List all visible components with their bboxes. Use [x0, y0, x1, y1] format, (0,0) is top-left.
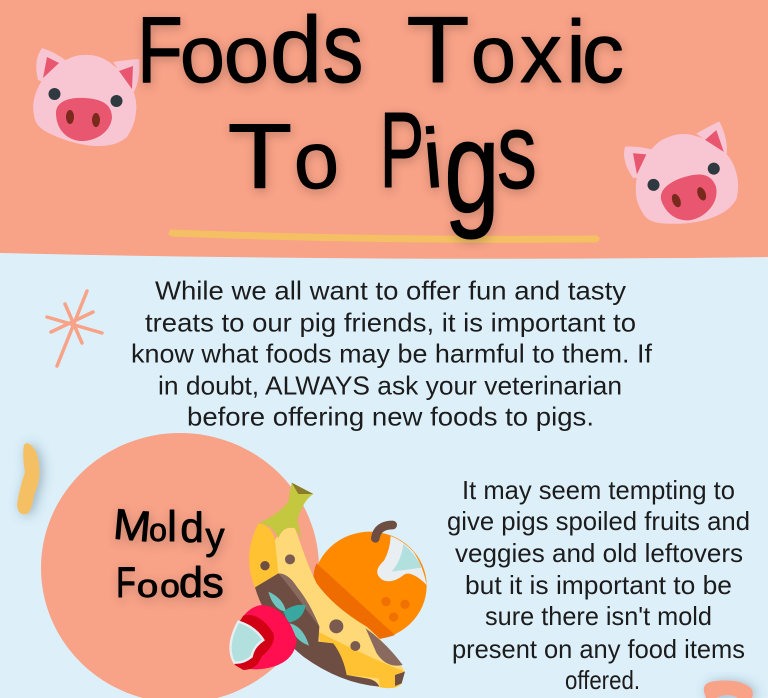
intro text: treats to our pig friends, it is important to	[145, 308, 636, 338]
description text: veggies and old leftovers	[455, 538, 743, 568]
description text: present on any food items	[452, 634, 745, 664]
title: i	[566, 2, 586, 101]
intro text: know what foods may be harmful to them. If	[131, 338, 653, 368]
intro text: in doubt, ALWAYS ask your veterinarian	[158, 370, 622, 400]
description text	[447, 475, 750, 695]
title: o	[291, 115, 342, 208]
description text: sure there isn't mold	[485, 601, 712, 631]
heading: Moldy Foods: o	[137, 569, 158, 604]
heading: Moldy Foods: l	[167, 503, 177, 551]
icon: moldy foods illustration	[230, 483, 427, 688]
heading: Moldy Foods: d	[179, 559, 203, 607]
title: g	[444, 94, 500, 240]
intro text: While we all want to offer fun and tasty	[155, 276, 626, 306]
title: o	[177, 9, 228, 102]
heading: Moldy Foods: d	[180, 504, 204, 551]
decorative salmon blob bottom right	[704, 681, 753, 698]
banana	[249, 483, 405, 688]
orange	[313, 525, 427, 640]
description text: offered.	[565, 665, 640, 695]
title: F	[137, 0, 183, 103]
icon: pig right	[617, 111, 752, 241]
title: o	[221, 9, 272, 102]
icon: starburst	[47, 291, 102, 366]
heading: Moldy Foods: y	[206, 516, 224, 558]
heading: Moldy Foods: o	[160, 569, 180, 605]
title	[137, 0, 624, 240]
heading: Moldy Foods: M	[111, 500, 153, 551]
heading: Moldy Foods: o	[149, 512, 167, 548]
decorative yellow blob	[17, 443, 39, 514]
strawberry	[230, 592, 309, 670]
description text: but it is important to be	[465, 570, 732, 600]
title: d	[270, 0, 322, 102]
intro text: before offering new foods to pigs.	[187, 402, 594, 432]
panel: header band	[0, 0, 768, 259]
title: i	[419, 110, 446, 206]
title: P	[380, 91, 424, 211]
description text: give pigs spoiled fruits and	[447, 506, 750, 536]
icon: pig left	[33, 48, 139, 146]
title: s	[497, 91, 537, 212]
description text: It may seem tempting to	[462, 475, 735, 505]
title: o	[468, 9, 519, 102]
title: T	[228, 105, 292, 208]
heading: Moldy Foods	[111, 500, 224, 607]
salmon circle	[41, 433, 319, 698]
title: T	[406, 0, 470, 102]
heading: Moldy Foods: s	[202, 559, 224, 607]
intro text	[131, 276, 653, 432]
underline	[172, 233, 596, 239]
title: x	[520, 6, 562, 100]
title: c	[582, 6, 624, 100]
heading: Moldy Foods: F	[116, 560, 136, 607]
